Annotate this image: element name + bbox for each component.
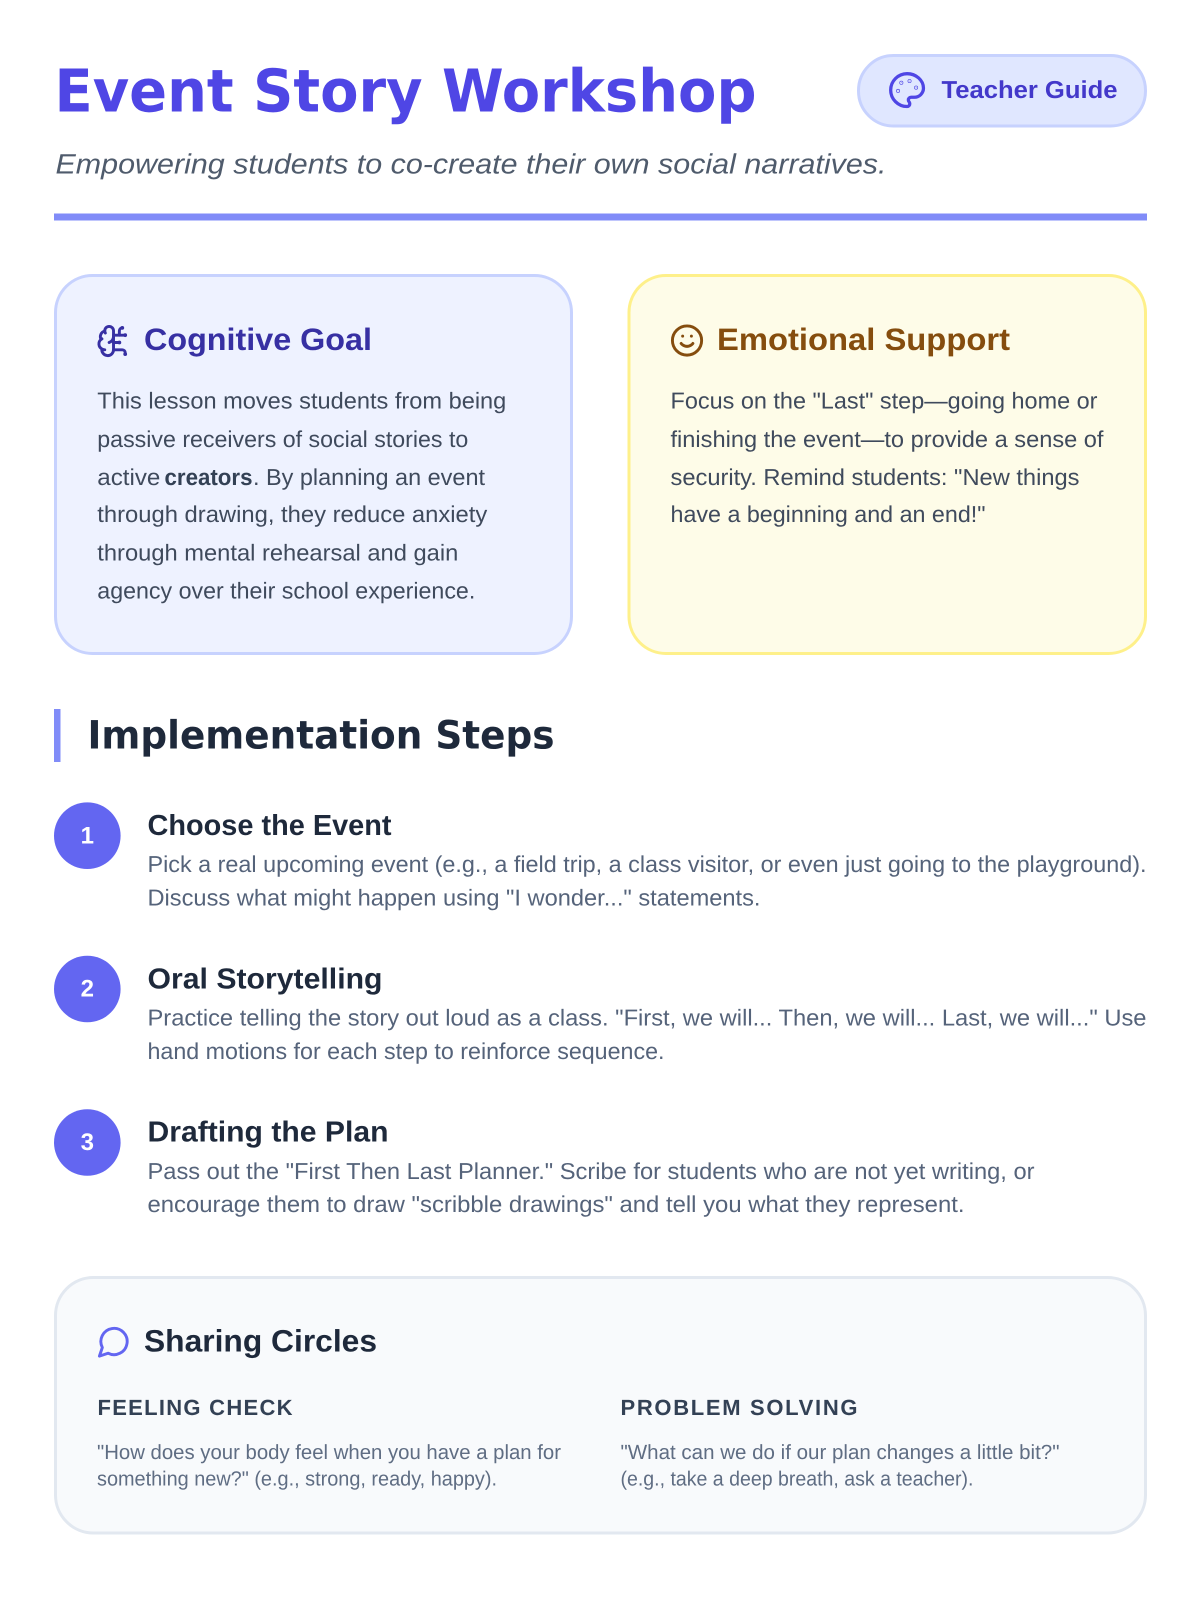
column: feeling check — [97, 1395, 561, 1490]
column: feeling check: "How does your body feel when you have a plan for — [97, 1441, 561, 1464]
icon: smile — [672, 326, 702, 355]
step title: Drafting the Plan — [148, 1116, 388, 1148]
heading: implementation steps: Implementation Steps — [88, 714, 554, 758]
panel: cognitive goal — [56, 276, 572, 654]
icon: brain — [99, 326, 126, 356]
step description: encourage them to draw "scribble drawings" and tell you what they represent. — [148, 1191, 964, 1217]
heading: cognitive goal: Cognitive Goal — [144, 322, 372, 357]
text block: emotional body: security. Remind students: "New things — [670, 464, 1080, 490]
step description: Discuss what might happen using "I wonder..." statements. — [148, 884, 760, 910]
step description — [148, 1004, 1146, 1064]
text block: emotional body — [670, 388, 1104, 527]
badge label: Teacher Guide — [942, 77, 1118, 104]
text block: cognitive body — [97, 388, 506, 604]
step number 1: 1 — [81, 822, 94, 850]
text block: cognitive body: creators — [164, 464, 252, 490]
step number 2 — [54, 956, 121, 1022]
text block: cognitive body: active — [97, 464, 160, 490]
step description: hand motions for each step to reinforce sequence. — [148, 1038, 664, 1064]
title: Event Story Workshop — [54, 56, 756, 126]
step 1 — [54, 802, 1147, 910]
text block: emotional body: finishing the event—to provide a sense of — [670, 426, 1104, 452]
step number 3: 3 — [81, 1129, 94, 1156]
column: feeling check: something new?" (e.g., strong, ready, happy). — [97, 1468, 497, 1490]
column: problem solving — [620, 1395, 1060, 1490]
column: problem solving: PROBLEM SOLVING — [620, 1395, 858, 1420]
step description — [148, 851, 1146, 910]
text block: emotional body: Focus on the "Last" step—going home or — [670, 388, 1098, 414]
panel: emotional support — [629, 276, 1146, 654]
text block: cognitive body: through drawing, they reduce anxiety — [97, 501, 488, 527]
icon: speech bubble — [99, 1328, 127, 1356]
text block: cognitive body: passive receivers of social stories to — [97, 426, 468, 452]
column: problem solving: "What can we do if our plan changes a little bit?" — [620, 1441, 1060, 1464]
step number 2: 2 — [81, 976, 94, 1002]
step description: Pass out the "First Then Last Planner." Scribe for students who are not yet writing, or — [148, 1158, 1035, 1184]
text block: cognitive body: This lesson moves students from being — [97, 388, 506, 414]
step 2 — [54, 956, 1147, 1064]
column: problem solving: (e.g., take a deep breath, ask a teacher). — [620, 1468, 974, 1490]
step description: Practice telling the story out loud as a class. "First, we will... Then, we will... Last, we will..." Use — [148, 1004, 1146, 1030]
badge: teacher guide — [858, 56, 1146, 126]
heading: emotional support: Emotional Support — [717, 322, 1010, 357]
step number 1 — [54, 802, 121, 869]
text block: cognitive body: through mental rehearsal and gain — [97, 540, 458, 566]
text block: emotional body: have a beginning and an end!" — [670, 501, 986, 527]
subtitle: Empowering students to co-create their own social narratives. — [56, 148, 886, 180]
step title: Choose the Event — [148, 810, 392, 842]
icon: palette — [891, 74, 923, 106]
step number 3 — [54, 1109, 121, 1176]
step description: Pick a real upcoming event (e.g., a field trip, a class visitor, or even just going to the playground). — [148, 851, 1146, 877]
heading: sharing circles: Sharing Circles — [144, 1324, 377, 1358]
step 3 — [54, 1109, 1035, 1217]
text block: cognitive body: . By planning an event — [253, 464, 486, 490]
panel: sharing circles — [56, 1278, 1146, 1533]
text block: cognitive body: agency over their school experience. — [97, 578, 475, 604]
column: feeling check: FEELING CHECK — [98, 1395, 293, 1420]
step description — [148, 1158, 1035, 1217]
step title: Oral Storytelling — [148, 964, 382, 996]
